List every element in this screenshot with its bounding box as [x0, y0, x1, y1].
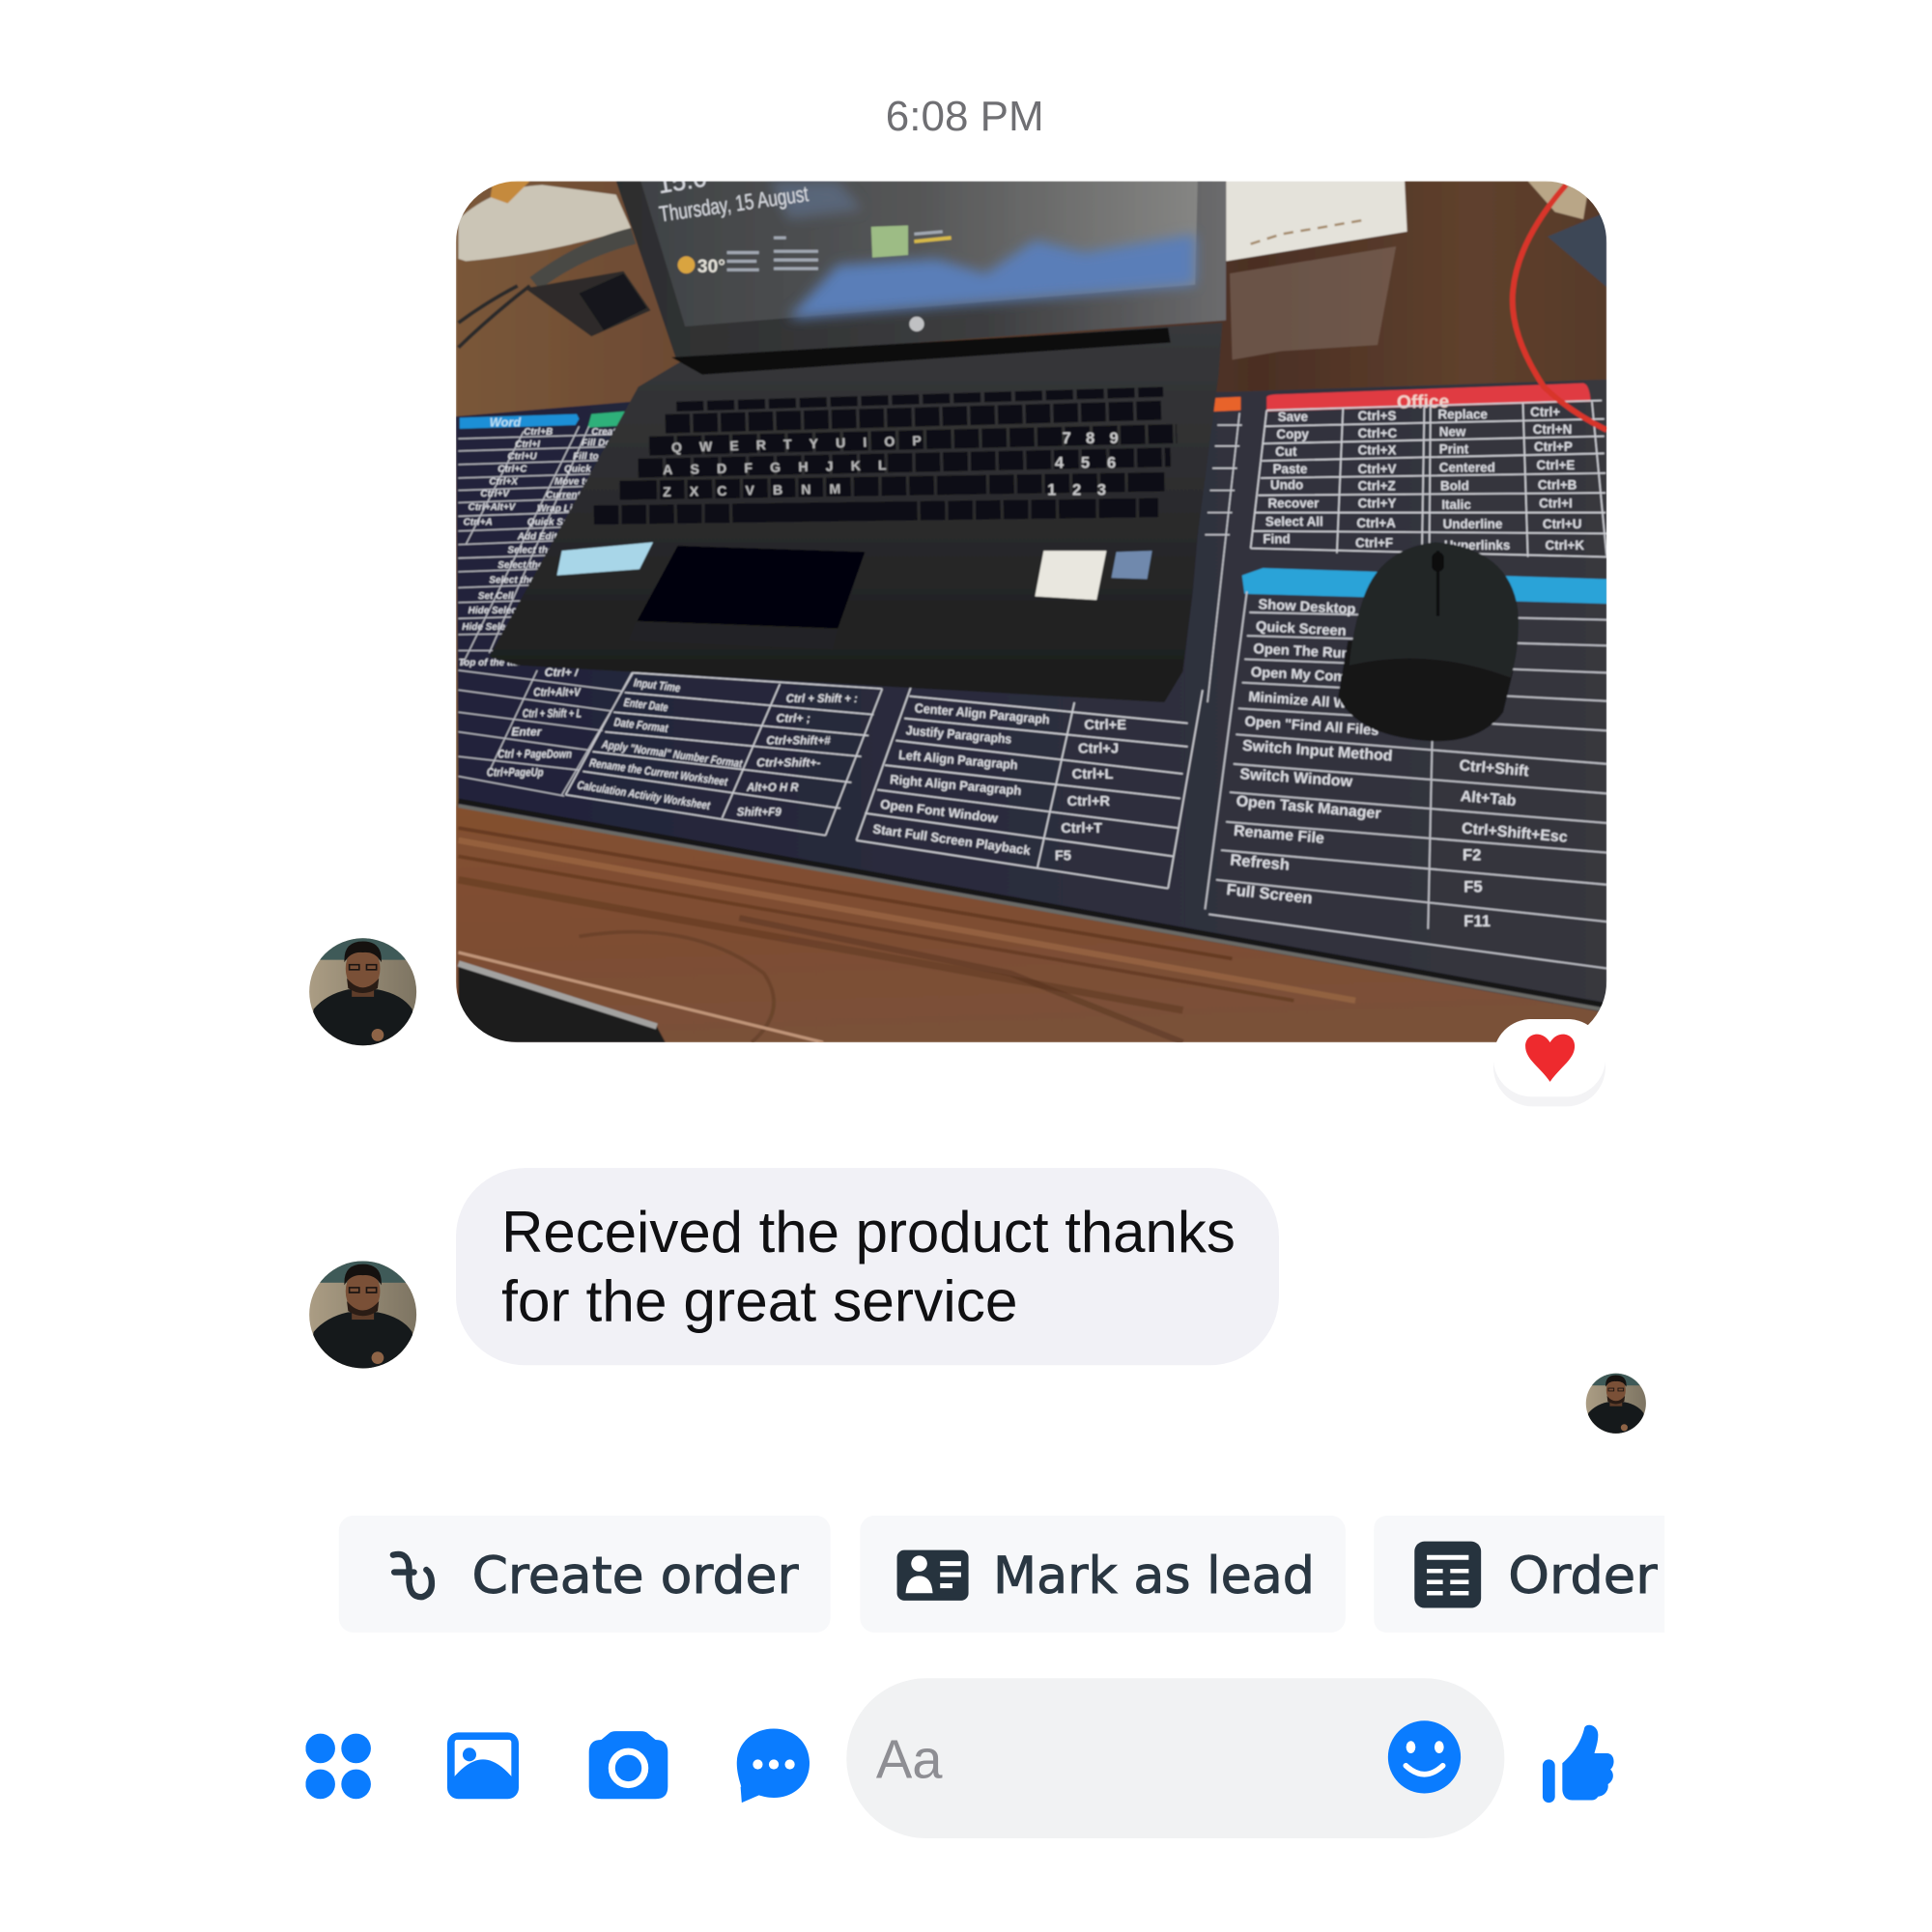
mat: word shortcuts column: Ctrl+A — [464, 517, 493, 527]
mat: word shortcuts column: Ctrl+V — [480, 489, 510, 499]
laptop lid — [616, 182, 1226, 359]
mat: excel shortcuts table: Apply "Normal" Number Format — [600, 737, 744, 771]
icon: contact card — [897, 1550, 969, 1601]
mat: paragraph shortcuts table: Justify Paragraphs — [905, 723, 1012, 747]
mat: office shortcuts table: Ctrl+F — [1355, 535, 1393, 550]
mat: word shortcuts column: Top of the table — [458, 658, 530, 668]
mat: word shortcuts column: Ctrl+Alt+V — [469, 502, 517, 513]
chip: order: Order — [1508, 1547, 1658, 1605]
mat: windows shortcuts table: Minimize All Windows — [1248, 690, 1396, 715]
mat: office shortcuts table: Centered — [1439, 461, 1495, 475]
mat: office shortcuts table: Find — [1263, 531, 1291, 546]
avatar: sender beside message — [309, 1261, 417, 1369]
mat: office shortcuts table: Hyperlinks — [1444, 538, 1510, 553]
mat: word shortcuts column: Ctrl+I — [515, 440, 540, 450]
avatar: sender beside photo — [309, 938, 417, 1046]
mat: windows shortcuts table: Refresh — [1230, 850, 1291, 874]
mat: windows shortcuts table: Ctrl+Shift — [1459, 757, 1530, 781]
mat: word shortcuts column: Ctrl+X — [489, 476, 519, 487]
mat: office shortcuts table: Ctrl+I — [1539, 497, 1573, 511]
mat: paragraph shortcuts table: Ctrl+L — [1072, 767, 1113, 782]
blue card — [1548, 212, 1606, 287]
mat: office shortcuts table: Paste — [1273, 462, 1307, 476]
icon: smiley — [1388, 1720, 1461, 1794]
mat: word shortcuts column: Select the — [489, 575, 535, 585]
mat: word shortcuts column: Create New — [591, 427, 645, 438]
mat: office shortcuts table: Print — [1439, 441, 1469, 456]
keyboard: ZXCVBNM — [663, 480, 859, 499]
mat: windows shortcuts table: Alt+Tab — [1460, 788, 1517, 810]
icon: gallery image — [447, 1732, 519, 1799]
mat: word shortcuts column: Set Cell — [478, 591, 514, 602]
mat: office shortcuts table: Bold — [1440, 479, 1469, 494]
mat: paragraph shortcuts table: Ctrl+J — [1078, 741, 1119, 756]
mat: windows shortcuts table: Ctrl+Shift+Esc — [1461, 820, 1568, 846]
laptop screen: 15:0 — [655, 162, 709, 199]
mat: paragraph shortcuts table: Ctrl+E — [1084, 718, 1126, 733]
mat: excel shortcuts table: Ctrl+Shift+- — [756, 755, 820, 769]
icon: order list — [1414, 1542, 1481, 1608]
mat: office shortcuts table: New — [1439, 425, 1466, 440]
router and cables — [458, 182, 650, 348]
mat: office shortcuts table: Recover — [1267, 497, 1319, 511]
placeholder text: Aa — [876, 1729, 943, 1790]
chip: create order — [339, 1516, 831, 1633]
desk mat — [456, 380, 1606, 1012]
mat: office shortcuts table: Ctrl+P — [1534, 440, 1573, 454]
mouse — [1338, 542, 1519, 741]
laptop — [489, 162, 1226, 702]
mat: word shortcuts column: Current Pag — [546, 490, 601, 500]
mat: office shortcuts table: Ctrl+X — [1358, 443, 1396, 458]
mat: office shortcuts table: Select All — [1265, 515, 1323, 529]
mat: office shortcuts table: Replace — [1438, 408, 1488, 422]
mat: office shortcuts table: Ctrl+V — [1358, 462, 1396, 476]
mat: word shortcuts column: Enter — [511, 724, 543, 738]
mat: word shortcuts column: Hide Selected — [469, 606, 532, 616]
mat: paragraph shortcuts table: Center Align Paragraph — [914, 700, 1050, 726]
mat: office shortcuts table: Office — [1397, 392, 1449, 413]
mat: excel shortcuts table: Ctrl+ ; — [777, 711, 810, 724]
mat: office shortcuts table: Undo — [1270, 477, 1303, 492]
reaction: heart — [1493, 1019, 1605, 1106]
mat: excel shortcuts table: Input Time — [633, 676, 681, 695]
mat: word shortcuts column: Ctrl + Shift + L — [523, 706, 582, 720]
mat: word shortcuts column: Ctrl+PageUp — [487, 766, 543, 780]
mat: windows shortcuts table: F2 — [1463, 845, 1481, 864]
icon: thumbs up — [1543, 1725, 1614, 1803]
mat: excel shortcuts table — [565, 672, 882, 836]
icon: camera — [589, 1731, 668, 1799]
avatar: seen indicator — [1585, 1373, 1646, 1434]
mat: windows shortcuts table — [1205, 568, 1606, 969]
mat: word shortcuts column: Quick Sum — [527, 517, 578, 527]
input field — [846, 1678, 1504, 1838]
mat: office shortcuts table — [1205, 384, 1606, 702]
intel sticker — [1112, 551, 1152, 579]
red cable — [1513, 185, 1606, 430]
mat: word shortcuts column: Fill Down — [582, 439, 624, 449]
mat: paragraph shortcuts table: Left Align Paragraph — [898, 748, 1018, 772]
photo: laptop on shortcut desk mat — [456, 162, 1606, 1042]
mat: office shortcuts table: Italic — [1441, 497, 1471, 512]
keyboard: 123 — [1047, 481, 1122, 499]
mat: office shortcuts table: Ctrl+N — [1533, 422, 1572, 437]
mat: windows shortcuts table: Switch Window — [1239, 766, 1353, 790]
reflection of calendar on desk — [1230, 246, 1396, 359]
mat: paragraph shortcuts table: Start Full Screen Playback — [872, 821, 1032, 858]
keyboard: QWERTYUIOP — [671, 432, 939, 455]
blue sticker — [557, 542, 653, 576]
mat: paragraph shortcuts table: Ctrl+T — [1061, 821, 1102, 837]
message text: Received the product thanks — [501, 1200, 1236, 1264]
chip: order — [1374, 1516, 1664, 1633]
keyboard: ASDFGHJKL — [663, 457, 904, 477]
mat: office shortcuts table: Ctrl+Z — [1358, 479, 1396, 494]
mat: word shortcuts column: Move to — [554, 476, 591, 487]
laptop screen: 30° — [697, 257, 725, 277]
mat: windows shortcuts table: Open My Computer — [1250, 665, 1382, 687]
chip: mark as lead — [860, 1516, 1346, 1633]
mat: word shortcuts column: Ctrl+Alt+V — [533, 686, 582, 699]
mat: excel shortcuts table: Alt+O H R — [746, 781, 799, 794]
mat: office shortcuts table: Underline — [1443, 517, 1502, 531]
mat: word shortcuts column: Ctrl+ / — [545, 666, 580, 679]
mat: paragraph shortcuts table: Open Font Window — [879, 797, 999, 826]
mat: word shortcuts column: Select the — [508, 546, 554, 556]
mat: office shortcuts table: Ctrl+Y — [1358, 497, 1396, 511]
mat: windows shortcuts table: Switch Input Method — [1241, 738, 1393, 765]
mat: windows shortcuts table: Quick Screen — [1256, 619, 1347, 639]
mat: excel shortcuts table: Ctrl+Shift+# — [766, 733, 831, 747]
mat: excel shortcuts table: Calculation Activity Worksheet — [576, 778, 712, 812]
mat: excel shortcuts table: Rename the Current Worksheet — [588, 755, 729, 789]
laptop screen: Thursday, 15 August — [658, 181, 810, 227]
mat: office shortcuts table: Ctrl+U — [1543, 517, 1581, 531]
mat: word shortcuts column: Select the — [497, 560, 544, 571]
mat: word shortcuts column: Add Edit — [517, 532, 557, 543]
mat: windows shortcuts table: Open Task Manager — [1236, 793, 1381, 822]
mat: office shortcuts table: Save — [1278, 410, 1308, 424]
mat: windows shortcuts table: Rename File — [1233, 823, 1325, 847]
icon: taka sign — [393, 1554, 432, 1597]
laptop base — [489, 323, 1222, 702]
keyboard: 456 — [1055, 454, 1133, 472]
mat: office shortcuts table: Ctrl+K — [1545, 538, 1584, 553]
mat: word shortcuts column: Ctrl + PageDown — [497, 747, 572, 760]
icon: chat bubble — [737, 1729, 810, 1803]
mat: excel shortcuts table: Enter Date — [623, 696, 669, 714]
mat: windows shortcuts table: Open "Find All Files" — [1244, 714, 1386, 739]
white sticker — [1035, 551, 1106, 600]
mat: word shortcuts column: Word — [490, 414, 521, 429]
mat: office shortcuts table: Ctrl+S — [1358, 409, 1396, 423]
mat: windows shortcuts table: Full Screen — [1226, 880, 1314, 907]
hp logo — [909, 317, 924, 331]
mat: windows shortcuts table: Open The Run — [1253, 641, 1350, 662]
mat: office shortcuts table: Ctrl+B — [1538, 477, 1577, 492]
mat: word shortcuts column: Ctrl+B — [524, 427, 553, 438]
mat: office shortcuts table: Copy — [1276, 427, 1309, 441]
mat: word shortcuts column — [458, 411, 645, 796]
mat: office shortcuts table: Ctrl+A — [1356, 516, 1396, 530]
mat: paragraph shortcuts table: Right Align Paragraph — [890, 772, 1022, 798]
desk calendar — [1226, 182, 1407, 261]
mat: word shortcuts column: Wrap Lines — [537, 503, 589, 514]
mat: paragraph shortcuts table: F5 — [1055, 848, 1071, 864]
mat: windows shortcuts table: Show Desktop — [1258, 597, 1356, 617]
object top right — [1528, 182, 1589, 219]
mat: paragraph shortcuts table: Ctrl+R — [1067, 794, 1110, 810]
icon: apps menu dots — [305, 1734, 371, 1799]
chip: create order: Create order — [472, 1547, 799, 1605]
message text: for the great service — [501, 1268, 1018, 1333]
mat: word shortcuts column: Ctrl+C — [497, 465, 527, 475]
mat: office shortcuts table: Ctrl+E — [1537, 458, 1575, 472]
mat: office shortcuts table: Cut — [1275, 444, 1297, 459]
mat: excel shortcuts table: Date Format — [613, 715, 669, 735]
mat: office shortcuts table: Ctrl+C — [1358, 426, 1397, 440]
mat: paragraph shortcuts table — [856, 678, 1203, 889]
timestamp: 6:08 PM — [886, 93, 1044, 140]
wood front of desk — [456, 801, 1606, 1042]
desk surface — [456, 182, 1606, 1042]
mat: word shortcuts column: Quick Fill — [564, 465, 608, 475]
chip: mark as lead: Mark as lead — [993, 1547, 1315, 1605]
mat: word shortcuts column: Fill to the — [573, 452, 616, 463]
mat: excel shortcuts table: Ctrl + Shift + : — [786, 692, 858, 705]
keyboard: 789 — [1062, 429, 1133, 447]
keyboard — [594, 392, 1177, 515]
mat: word shortcuts column: Hide Selected — [462, 622, 526, 633]
mat: windows shortcuts table: F5 — [1463, 877, 1483, 895]
mat: office shortcuts table: Ctrl+ — [1530, 405, 1560, 419]
touchpad — [637, 546, 865, 629]
message bubble — [456, 1168, 1279, 1365]
laptop screen — [640, 162, 1198, 327]
icon: red heart — [1525, 1035, 1575, 1082]
mat: excel shortcuts table: Shift+F9 — [737, 805, 781, 818]
mat: word shortcuts column: Ctrl+U — [508, 452, 537, 463]
mat: windows shortcuts table: F11 — [1463, 912, 1491, 930]
